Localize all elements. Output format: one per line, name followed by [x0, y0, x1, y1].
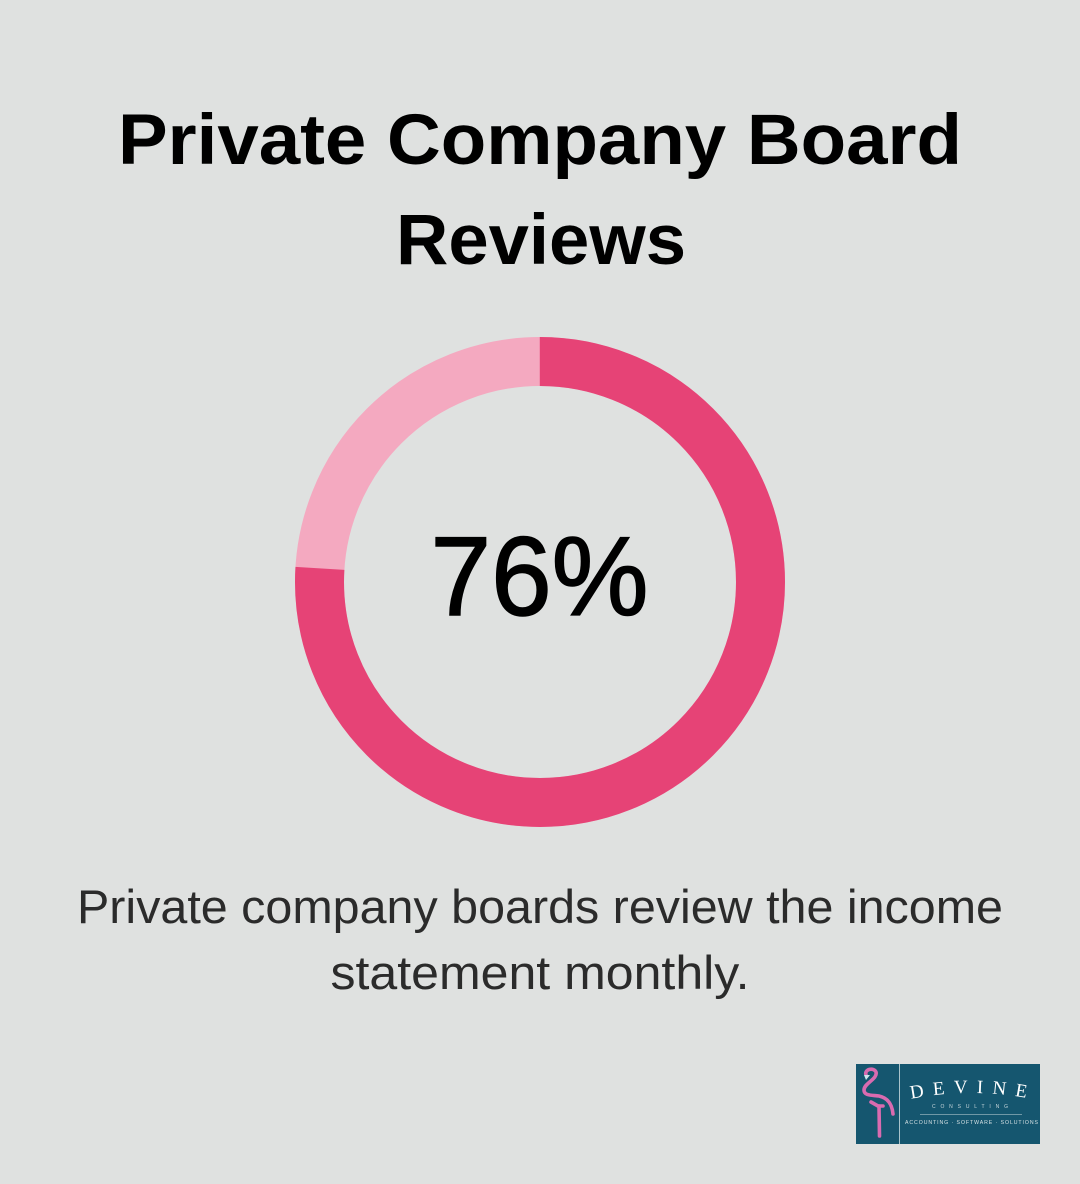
- icon: flamingo: [864, 1069, 893, 1136]
- logo: Devine Consulting: [856, 1064, 1040, 1144]
- percentage value: 76%: [430, 514, 648, 639]
- description text: statement monthly.: [330, 947, 750, 1000]
- description text: [77, 881, 1003, 1000]
- logo wordmark: ACCOUNTING · SOFTWARE · SOLUTIONS: [905, 1120, 1039, 1126]
- description text: Private company boards review the income: [77, 881, 1003, 934]
- title: [118, 101, 962, 280]
- title: Reviews: [396, 201, 686, 280]
- logo wordmark: DEVINE: [910, 1080, 1026, 1099]
- title: Private Company Board: [118, 101, 962, 180]
- donut chart: 76%: [320, 362, 760, 802]
- logo wordmark: CONSULTING: [932, 1104, 1008, 1110]
- logo wordmark: [905, 1080, 1039, 1126]
